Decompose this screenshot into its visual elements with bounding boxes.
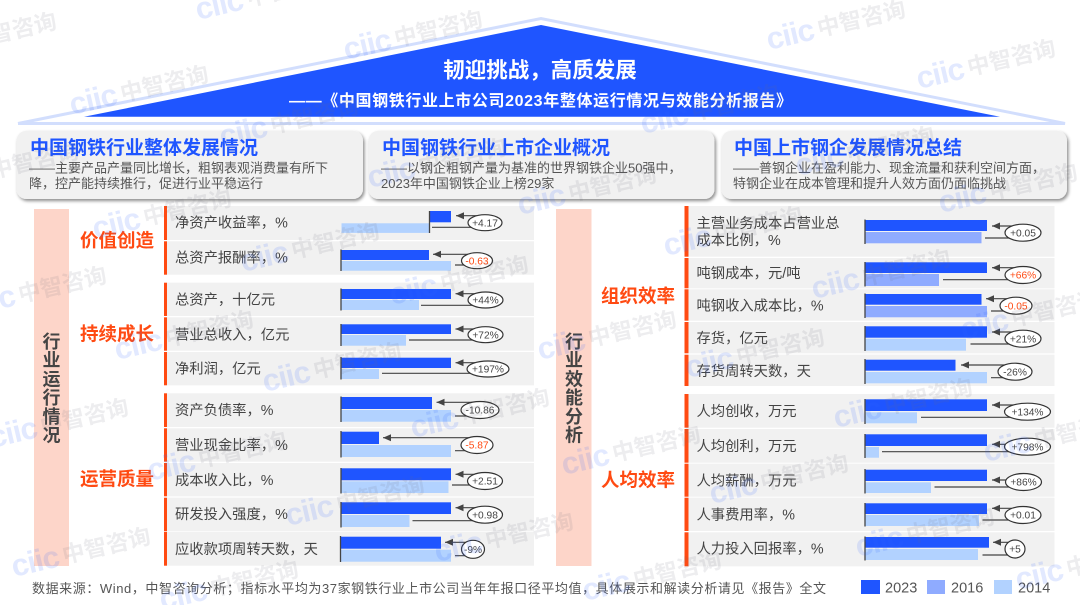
watermarks: ciic	[66, 77, 121, 122]
watermarks: 中智咨询	[334, 473, 427, 517]
row: profit per capita: 人均创利，万元	[696, 438, 797, 455]
row: profit per capita: +798%	[1011, 442, 1044, 453]
panel: industry efficiency band: 析	[565, 426, 583, 446]
watermarks: 中智咨询	[163, 307, 256, 351]
row: debt to asset ratio: 资产负债率，%	[175, 402, 274, 419]
watermarks: 中智咨询	[38, 395, 131, 439]
row: net profit: 净利润，亿元	[175, 360, 261, 378]
row: pay per capita	[684, 464, 1054, 497]
watermarks: 中智咨询	[712, 203, 805, 247]
row: pay per capita: +86%	[1010, 478, 1037, 489]
watermarks: 中智咨询	[631, 548, 724, 592]
row: main cost ratio: 主营业务成本占营业总	[696, 215, 839, 232]
watermarks: 中智咨询	[610, 422, 703, 466]
row: revenue cost ratio per ton	[684, 289, 1054, 321]
row: cost per ton: 吨钢成本，元/吨	[696, 265, 801, 282]
watermarks: ciic	[763, 12, 818, 57]
row: inventory turnover days: 存货周转天数，天	[696, 363, 811, 380]
category: sustained growth: 持续成长	[80, 324, 154, 344]
row: total assets: 总资产，十亿元	[175, 292, 275, 308]
watermarks: 中智咨询	[987, 160, 1080, 204]
watermarks: ciic	[340, 22, 395, 67]
panel: listed companies card: 2023年中国钢铁企业上榜29家	[381, 176, 554, 191]
watermarks: 中智咨询	[566, 162, 659, 206]
row: inventory turnover days: -26%	[1003, 367, 1027, 378]
watermarks: ciic	[386, 267, 441, 312]
watermarks: ciic	[282, 488, 337, 533]
row: main cost ratio: +0.05	[1010, 228, 1036, 239]
panel: industry efficiency band: 行	[565, 332, 583, 352]
row: total revenue: 营业总收入，亿元	[175, 326, 289, 344]
row: total revenue: +72%	[472, 330, 499, 341]
row: inventory: 存货，亿元	[696, 330, 768, 347]
row: R and D intensity: +0.98	[472, 510, 498, 521]
watermarks: 中智咨询	[311, 339, 404, 383]
row: return on assets: 总资产报酬率，%	[175, 250, 288, 266]
panel: industry operation band: 运	[42, 369, 60, 389]
row: total assets	[164, 283, 534, 316]
watermarks: 中智咨询	[196, 428, 289, 472]
watermarks: ciic	[830, 390, 885, 435]
row: return on assets	[164, 241, 534, 275]
watermarks: ciic	[259, 354, 314, 399]
watermarks: ciic	[706, 466, 761, 511]
panel: industry efficiency band	[556, 209, 592, 566]
row: cost per ton	[684, 258, 1054, 288]
watermarks: 中智咨询	[141, 186, 234, 230]
panel: industry operation band: 业	[42, 351, 60, 371]
legend: 2016	[951, 580, 983, 596]
watermarks: 中智咨询	[965, 36, 1058, 80]
panel: industry operation band	[34, 209, 69, 566]
row: personnel cost rate: 人事费用率，%	[696, 506, 795, 524]
title: 韧迎挑战，高质发展	[443, 58, 637, 82]
row: inventory	[684, 322, 1054, 353]
row: revenue per capita	[684, 394, 1054, 428]
watermarks: 中智咨询	[459, 385, 552, 429]
watermarks: ciic	[808, 261, 863, 306]
watermarks: 中智咨询	[844, 123, 937, 167]
legend	[861, 580, 1050, 596]
row: total assets: +44%	[472, 296, 499, 307]
header roof banner	[18, 18, 1065, 124]
row: receivable turnover days	[164, 532, 534, 566]
row: debt to asset ratio: -10.86	[466, 406, 495, 417]
watermarks: ciic	[407, 400, 462, 445]
watermarks: ciic	[660, 218, 715, 263]
category: operating quality: 运营质量	[80, 468, 154, 490]
watermarks: 中智咨询	[689, 81, 782, 125]
source note: 数据来源：Wind，中智咨询分析；指标水平均为37家钢铁行业上市公司当年年报口径平均值，具体展示和解读分析请见《报告》全文	[32, 581, 826, 597]
row: revenue cost ratio per ton: 吨钢收入成本比，%	[696, 298, 824, 314]
category: organisational efficiency: 组织效率	[601, 286, 675, 306]
panel: summary card	[722, 131, 1067, 199]
watermarks: ciic	[216, 109, 271, 154]
row: total revenue	[164, 317, 534, 351]
watermarks: 中智咨询	[392, 7, 485, 51]
watermarks: 中智咨询	[208, 557, 301, 601]
watermarks: ciic	[237, 234, 292, 279]
watermarks: ciic	[637, 96, 692, 141]
row: R and D intensity	[164, 498, 534, 531]
watermarks: ciic	[144, 443, 199, 488]
row: profit per capita	[684, 429, 1054, 463]
row: labour input return: 人力投入回报率，%	[696, 540, 824, 558]
row: inventory turnover days	[684, 355, 1054, 386]
subtitle: ——《中国钢铁行业上市公司2023年整体运行情况与效能分析报告》	[289, 91, 792, 110]
watermarks: ciic	[682, 340, 737, 385]
legend: 2023	[885, 580, 917, 596]
row: labour input return	[684, 532, 1054, 566]
row: labour input return: +5	[1009, 545, 1021, 556]
watermarks: 中智咨询	[586, 307, 679, 351]
row: R and D intensity: 研发投入强度，%	[175, 506, 288, 523]
watermarks: ciic	[852, 519, 907, 564]
row: revenue per capita: +134%	[1011, 407, 1044, 418]
watermarks: 中智咨询	[904, 504, 997, 548]
panel: industry operation band: 情	[42, 407, 60, 427]
watermarks: 中智咨询	[289, 219, 382, 263]
watermarks: ciic	[431, 524, 486, 569]
row: receivable turnover days: -9%	[464, 545, 482, 556]
panel: summary card: ——普钢企业在盈利能力、现金流量和获利空间方面，	[733, 160, 1045, 176]
row: cost to revenue	[164, 463, 534, 496]
row: personnel cost rate: +0.01	[1010, 511, 1036, 522]
watermarks: 中智咨询	[416, 135, 509, 179]
row: return on equity: 净资产收益率，%	[175, 215, 288, 232]
panel: summary card: 特钢企业在成本管理和提升人效方面仍面临挑战	[733, 176, 1006, 191]
watermarks: 中智咨询	[118, 62, 211, 106]
row: pay per capita: 人均薪酬，万元	[696, 472, 797, 490]
panel: industry operation band: 行	[42, 388, 60, 408]
watermarks: 中智咨询	[268, 94, 361, 138]
panel: industry overview card	[16, 131, 363, 199]
panel: industry efficiency band: 能	[565, 388, 583, 408]
row: main cost ratio	[684, 206, 1054, 257]
panel: industry overview card: 中国钢铁行业整体发展情况	[30, 136, 258, 159]
row: operating cash ratio: -5.87	[465, 441, 489, 452]
panel: industry efficiency band: 业	[565, 351, 583, 371]
legend: 2014	[1018, 580, 1050, 596]
watermarks: 中智咨询	[882, 375, 975, 419]
row: main cost ratio: 成本比例，%	[696, 232, 781, 249]
panel: listed companies card: 中国钢铁行业上市企业概况	[382, 136, 610, 159]
row: debt to asset ratio	[164, 393, 534, 427]
watermarks: ciic	[980, 424, 1035, 469]
row: net profit: +197%	[472, 365, 504, 376]
panel: summary card: 中国上市钢企发展情况总结	[734, 136, 962, 159]
watermarks: ciic	[792, 138, 847, 183]
panel: industry overview card: ——主要产品产量同比增长，粗钢表观消费量有所下	[29, 160, 328, 176]
panel: industry operation band: 况	[42, 426, 60, 446]
watermarks: 中智咨询	[758, 451, 851, 495]
row: receivable turnover days: 应收款项周转天数，天	[175, 540, 318, 558]
watermarks: 中智咨询	[16, 263, 109, 307]
row: return on equity	[164, 206, 534, 240]
watermarks: ciic	[913, 51, 968, 96]
row: return on assets: -0.63	[465, 256, 489, 267]
watermarks: ciic	[364, 150, 419, 195]
watermarks: ciic	[514, 177, 569, 222]
panel: industry efficiency band: 效	[565, 369, 583, 389]
watermarks: ciic	[558, 437, 613, 482]
watermarks: ciic	[8, 539, 63, 584]
watermarks: ciic	[89, 201, 144, 246]
panel: listed companies card	[368, 131, 714, 199]
row: net profit	[164, 352, 534, 385]
row: cost to revenue: +2.51	[472, 477, 498, 488]
panel: industry operation band: 行	[42, 332, 60, 352]
row: operating cash ratio	[164, 428, 534, 462]
watermarks: ciic	[534, 322, 589, 367]
watermarks: 中智咨询	[60, 524, 153, 568]
row: cost per ton: +66%	[1010, 271, 1036, 282]
watermarks: 中智咨询	[438, 252, 531, 296]
watermarks: ciic	[1012, 552, 1067, 597]
watermarks: ciic	[957, 302, 1012, 347]
watermarks: ciic	[111, 322, 166, 367]
panel: industry efficiency band: 分	[565, 407, 583, 427]
panel: industry overview card: 降，控产能持续推行，促进行业平稳运行	[29, 176, 263, 191]
category: per capita efficiency: 人均效率	[601, 470, 675, 490]
row: inventory: +21%	[1010, 334, 1036, 345]
row: return on equity: +4.17	[472, 218, 498, 229]
watermarks: 中智咨询	[483, 509, 576, 553]
row: operating cash ratio: 营业现金比率，%	[175, 437, 288, 454]
row: revenue cost ratio per ton: -0.05	[1004, 301, 1028, 312]
watermarks: ciic	[935, 175, 990, 220]
row: personnel cost rate	[684, 498, 1054, 531]
row: cost to revenue: 成本收入比，%	[175, 472, 274, 489]
panel: listed companies card: ——以钢企粗钢产量为基准的世界钢铁企业50强中，	[381, 160, 681, 176]
watermarks: 中智咨询	[734, 325, 827, 369]
row: revenue per capita: 人均创收，万元	[696, 403, 797, 420]
watermarks: 中智咨询	[860, 246, 953, 290]
category: value creation: 价值创造	[80, 230, 155, 251]
